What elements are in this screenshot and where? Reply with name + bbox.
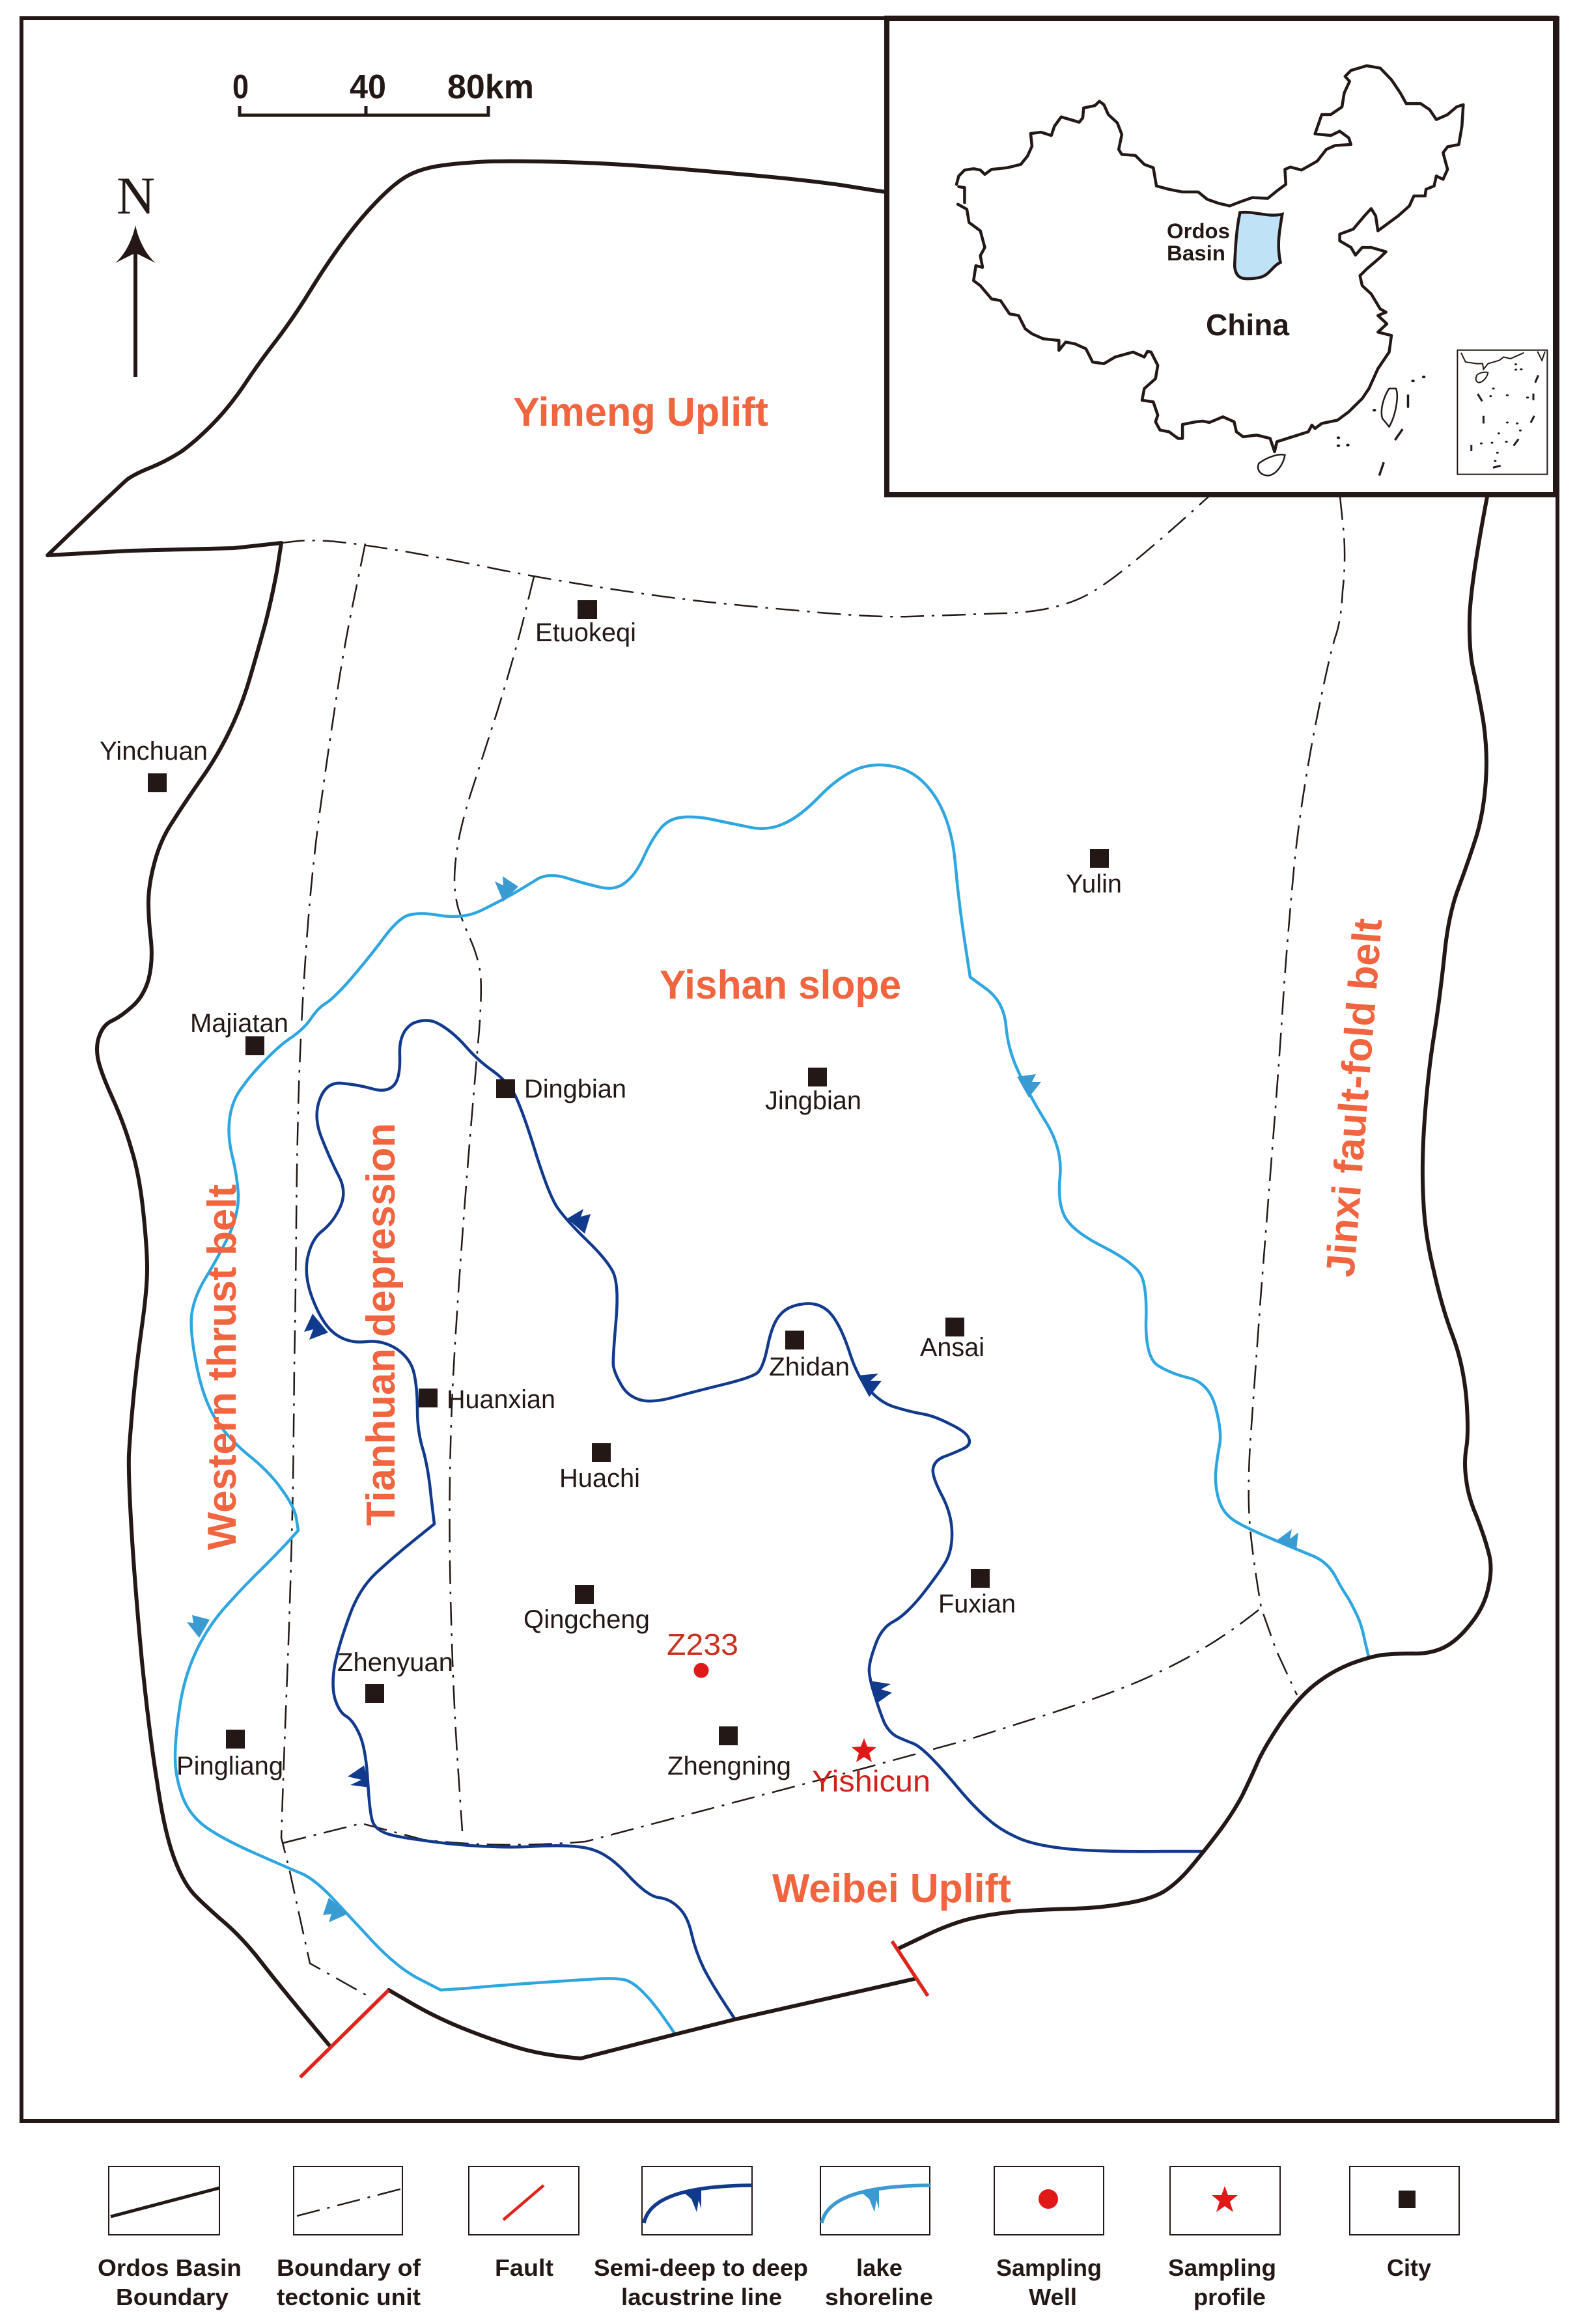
cities: Dingbian [524, 1075, 626, 1103]
north arrow [115, 166, 156, 377]
South China Sea mini inset [1457, 350, 1547, 475]
cities: Etuokeqi [535, 618, 636, 647]
legend: City: City [1387, 2254, 1431, 2281]
legend: Semi-deep to deep lacustrine line: Semi-deep to deep [594, 2254, 808, 2281]
scale bar: 0 [232, 68, 249, 106]
region labels: Weibei Uplift [772, 1866, 1011, 1911]
sampling profile Yishicun: Yishicun [812, 1764, 930, 1798]
Ordos Basin boundary [48, 161, 1491, 2058]
cities: Yulin [1066, 870, 1122, 898]
legend: Boundary of tectonic unit: Boundary of [277, 2254, 421, 2281]
region labels: Tianhuan depression [359, 1123, 404, 1526]
legend: Sampling profile: Sampling [1168, 2254, 1276, 2281]
legend: Ordos Basin Boundary [98, 2166, 242, 2310]
inset labels: Basin [1167, 242, 1225, 265]
Ordos Basin highlight [1235, 212, 1282, 279]
legend: Semi-deep to deep lacustrine line: lacustrine line [621, 2284, 782, 2310]
China outline [956, 66, 1547, 476]
region labels: Jinxi fault-fold belt [1318, 917, 1391, 1279]
sampling profile Yishicun [812, 1738, 930, 1798]
north arrow: N [117, 166, 155, 225]
region labels: Yishan slope [660, 963, 901, 1008]
region labels: Western thrust belt [200, 1184, 245, 1550]
region labels: Yimeng Uplift [513, 390, 768, 435]
cities: Majiatan [190, 1009, 288, 1038]
semi-deep to deep lacustrine line [304, 1020, 1204, 2019]
legend: lake shoreline: shoreline [825, 2284, 933, 2310]
legend: Semi-deep to deep lacustrine line [594, 2166, 808, 2310]
cities: Jingbian [765, 1086, 861, 1115]
cities: Huanxian [447, 1385, 555, 1414]
cities: Ansai [920, 1333, 984, 1362]
cities: Zhenyuan [337, 1648, 453, 1677]
cities: Qingcheng [523, 1605, 650, 1634]
scale bar [232, 68, 534, 115]
inset map panel: China [887, 18, 1556, 495]
legend: Boundary of tectonic unit: tectonic unit [277, 2284, 421, 2310]
region labels [200, 390, 1391, 1911]
legend: Sampling Well: Sampling [996, 2254, 1102, 2281]
legend: Sampling profile [1168, 2166, 1280, 2310]
legend: lake shoreline [820, 2166, 933, 2310]
lake shoreline [175, 765, 1369, 2034]
cities: Zhengning [667, 1752, 791, 1780]
legend: Ordos Basin Boundary: Ordos Basin [98, 2254, 242, 2281]
faults [300, 1941, 928, 2077]
legend: Fault: Fault [495, 2254, 553, 2281]
cities: Huachi [559, 1464, 640, 1493]
legend: Sampling Well: Well [1029, 2284, 1077, 2310]
sampling well Z233 [667, 1627, 738, 1678]
cities [100, 600, 1122, 1780]
inset labels: China [1206, 308, 1289, 342]
inset labels: Ordos [1167, 219, 1230, 243]
inset labels [1167, 219, 1289, 342]
sampling well Z233: Z233 [667, 1627, 738, 1661]
legend [98, 2166, 1459, 2310]
scale bar: 80km [447, 68, 534, 106]
legend: Sampling Well [994, 2166, 1104, 2310]
legend: Boundary of tectonic unit [277, 2166, 421, 2310]
legend: Ordos Basin Boundary: Boundary [116, 2284, 229, 2310]
scale bar: 40 [350, 68, 386, 106]
cities: Zhidan [769, 1353, 850, 1381]
legend: Sampling profile: profile [1193, 2284, 1266, 2310]
cities: Yinchuan [100, 737, 208, 766]
cities: Pingliang [176, 1752, 283, 1780]
legend: lake shoreline: lake [856, 2254, 902, 2281]
cities: Fuxian [938, 1590, 1016, 1618]
legend: Fault [469, 2166, 579, 2281]
legend: City [1350, 2166, 1459, 2281]
tectonic unit boundaries (dash-dot lines) [281, 497, 1345, 1998]
